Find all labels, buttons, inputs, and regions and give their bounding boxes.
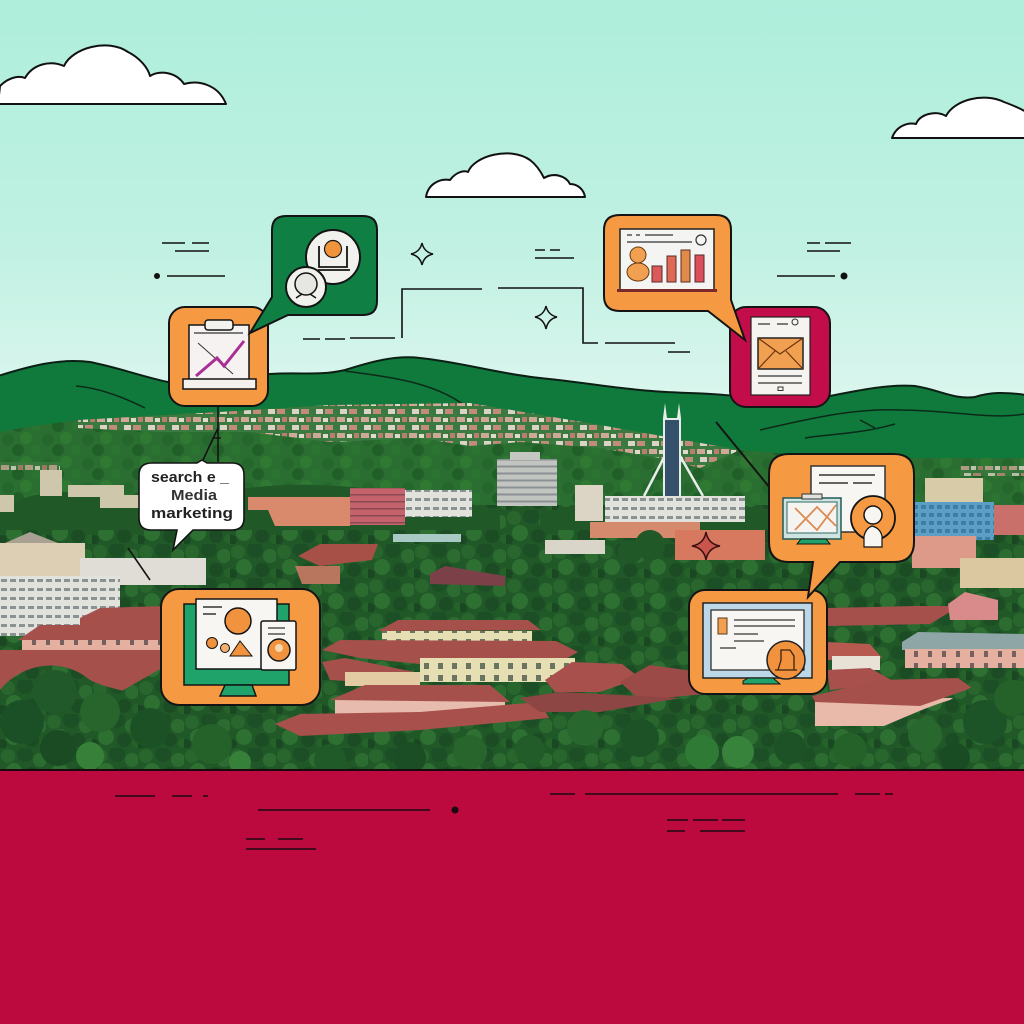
pink right block [994, 505, 1024, 535]
icon: article screen [703, 603, 812, 684]
speech bubble: green with people icons [250, 216, 377, 333]
central small roofs [295, 534, 605, 586]
salmon low block [248, 497, 350, 526]
hillside with village [0, 403, 1024, 560]
icon: person circle [286, 267, 326, 307]
icon: avatar badge [851, 496, 895, 547]
speech bubble: orange analytics monitor [769, 454, 914, 597]
low white block [605, 496, 745, 522]
central campus [275, 620, 705, 736]
trees stepping up behind upper buildings [0, 485, 800, 530]
speech bubble: orange bar chart [604, 215, 745, 340]
panel: orange growth chart [169, 307, 268, 406]
salmon campus behind star [590, 522, 765, 564]
panel: green monitor with audience [161, 589, 320, 705]
tan blocks upper right [925, 478, 983, 502]
speech bubble: search media marketing: search e _ [151, 469, 230, 486]
icon: analytics monitor [783, 494, 841, 544]
icon: user badge [767, 641, 805, 679]
connector lines in sky [154, 243, 851, 352]
mid city buildings [0, 403, 1024, 588]
cream right block [960, 558, 1024, 588]
speech bubble: search media marketing: marketing [151, 505, 233, 522]
foreground treeline [0, 666, 1024, 776]
icon: green monitor [184, 604, 289, 696]
cloud centre [426, 153, 585, 197]
icon: document [811, 466, 885, 532]
pink block [350, 488, 405, 525]
crimson footer band [0, 770, 1024, 1024]
sparkle right [535, 306, 557, 329]
icon: bar chart screen [617, 229, 717, 292]
left lower roofs [0, 650, 162, 692]
cloud top right [892, 98, 1024, 138]
grey tower block [497, 452, 557, 506]
icon: envelope page [751, 317, 810, 395]
salmon right block [912, 536, 976, 568]
sparkle over campus [692, 532, 720, 560]
cloud top left [0, 45, 226, 104]
speech bubble: search media marketing: Media [171, 487, 218, 504]
panel: crimson email newsletter [730, 307, 830, 407]
footer top edge [0, 769, 1024, 771]
icon: mobile card [261, 621, 296, 670]
blue block [915, 502, 994, 540]
tan block [575, 485, 603, 521]
tree masses [0, 505, 1024, 770]
landmark tower with stays [644, 403, 703, 496]
icon: presenter circle [306, 230, 360, 284]
white office block [405, 490, 472, 517]
footer placeholder lines [115, 794, 893, 849]
sky background [0, 0, 1024, 440]
speech bubble: search media marketing [139, 460, 244, 550]
icon: clipboard with trend line [183, 320, 256, 389]
panel: orange article monitor [689, 590, 827, 694]
sparkle left [411, 243, 433, 265]
left high-rises [0, 532, 206, 662]
green hills [0, 357, 1024, 470]
right campus [812, 592, 1024, 726]
connector lines over city [128, 406, 770, 580]
small left buildings [0, 470, 150, 512]
icon: audience sheet [196, 599, 277, 669]
